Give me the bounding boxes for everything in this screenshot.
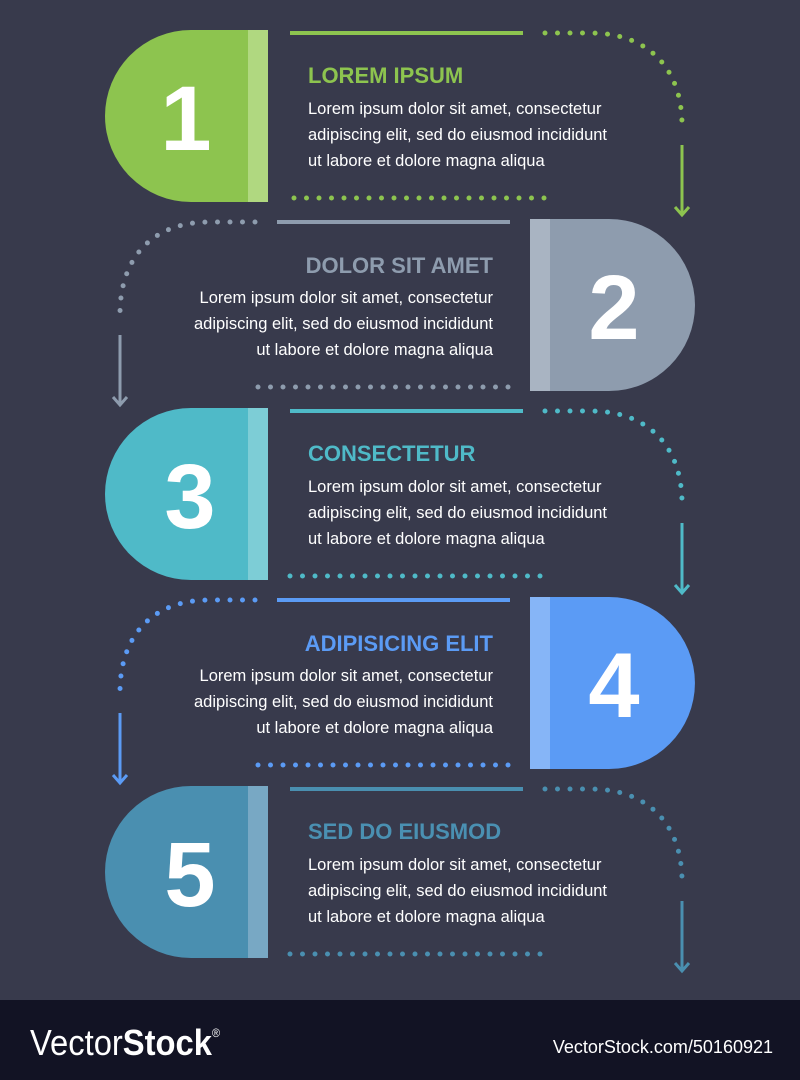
body 3: Lorem ipsum dolor sit amet, consectetur xyxy=(308,478,602,496)
step 5 xyxy=(105,786,689,971)
dotted connector 1 xyxy=(294,33,682,198)
body 2: ut labore et dolore magna aliqua xyxy=(256,341,494,359)
footer url: VectorStock.com/50160921 xyxy=(553,1037,773,1057)
dotted connector 3 xyxy=(290,411,682,576)
footer xyxy=(0,1000,800,1080)
body 4: ut labore et dolore magna aliqua xyxy=(256,719,494,737)
dotted connector 4 xyxy=(120,600,510,765)
step 3 xyxy=(105,408,689,593)
top bar 4 xyxy=(277,598,510,602)
body 5: ut labore et dolore magna aliqua xyxy=(308,908,545,926)
body 1 xyxy=(308,100,607,170)
shape 1: 1 xyxy=(160,68,212,170)
body 1: Lorem ipsum dolor sit amet, consectetur xyxy=(308,100,602,118)
arrow 2 xyxy=(113,335,127,405)
top bar 5 xyxy=(290,787,523,791)
body 3 xyxy=(308,478,607,548)
title 4: ADIPISICING ELIT xyxy=(305,631,494,656)
step 1 xyxy=(105,30,689,215)
body 4: Lorem ipsum dolor sit amet, consectetur xyxy=(200,667,493,685)
dotted connector 5 xyxy=(290,789,682,954)
shape 1 xyxy=(105,30,268,202)
body 3: adipiscing elit, sed do eiusmod incididunt xyxy=(308,504,607,522)
arrow 5 xyxy=(675,901,689,971)
body 4 xyxy=(194,667,494,737)
top bar 1 xyxy=(290,31,523,35)
body 2: adipiscing elit, sed do eiusmod incididunt xyxy=(194,315,493,333)
top bar 2 xyxy=(277,220,510,224)
dotted connector 2 xyxy=(120,222,510,387)
shape 3 xyxy=(105,408,268,580)
body 3: ut labore et dolore magna aliqua xyxy=(308,530,545,548)
shape 4: 4 xyxy=(588,635,640,737)
step 4 xyxy=(113,597,695,783)
title 5: SED DO EIUSMOD xyxy=(308,819,501,844)
shape 4 xyxy=(530,597,695,769)
step 2 xyxy=(113,219,695,405)
arrow 4 xyxy=(113,713,127,783)
footer logo: ® xyxy=(212,1026,220,1040)
body 5: Lorem ipsum dolor sit amet, consectetur xyxy=(308,856,602,874)
shape 5: 5 xyxy=(164,824,216,926)
title 3: CONSECTETUR xyxy=(308,441,476,466)
title 2: DOLOR SIT AMET xyxy=(306,253,494,278)
body 5: adipiscing elit, sed do eiusmod incididunt xyxy=(308,882,607,900)
title 1: LOREM IPSUM xyxy=(308,63,463,88)
body 1: adipiscing elit, sed do eiusmod incididunt xyxy=(308,126,607,144)
shape 3: 3 xyxy=(164,446,216,548)
body 4: adipiscing elit, sed do eiusmod incididunt xyxy=(194,693,493,711)
shape 2 xyxy=(530,219,695,391)
arrow 1 xyxy=(675,145,689,215)
footer logo: VectorStock xyxy=(30,1022,221,1063)
body 2: Lorem ipsum dolor sit amet, consectetur xyxy=(200,289,493,307)
top bar 3 xyxy=(290,409,523,413)
body 2 xyxy=(194,289,494,359)
arrow 3 xyxy=(675,523,689,593)
shape 2: 2 xyxy=(588,257,640,359)
body 5 xyxy=(308,856,607,926)
body 1: ut labore et dolore magna aliqua xyxy=(308,152,545,170)
shape 5 xyxy=(105,786,268,958)
